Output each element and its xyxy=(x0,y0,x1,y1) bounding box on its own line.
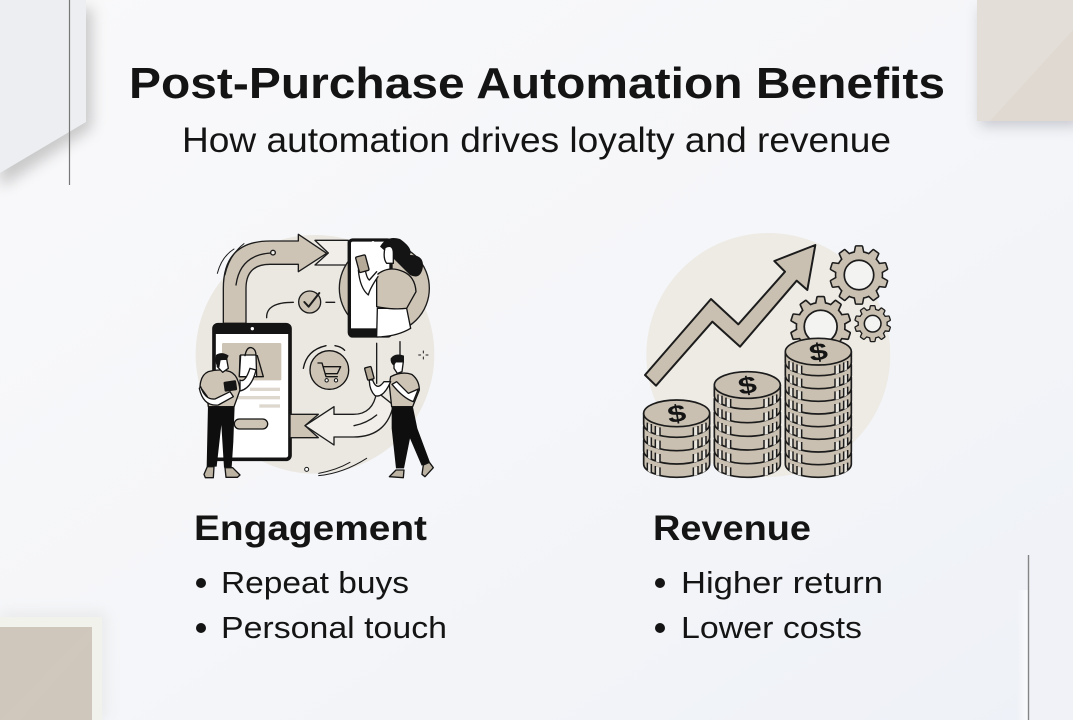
heading: engagement: Engagement xyxy=(194,509,427,548)
icon: small gear xyxy=(855,306,890,341)
panel: revenue text xyxy=(653,509,883,645)
decoration: bottom-left beige panel xyxy=(0,612,106,720)
list item: higher return: Higher return xyxy=(681,565,883,600)
icon: coin stack small xyxy=(644,400,710,477)
list item: lower costs: Lower costs xyxy=(681,610,862,645)
icon: coin stack medium: $ xyxy=(736,371,759,401)
icon: rising arrow xyxy=(645,245,815,386)
icon: lower curved arrow xyxy=(290,342,428,476)
icon: coin stack large xyxy=(785,338,851,477)
panel: engagement text xyxy=(194,509,447,645)
heading: revenue: Revenue xyxy=(653,509,811,548)
decoration: bottom-right line xyxy=(1017,555,1073,720)
illustration: engagement xyxy=(196,234,434,478)
icon: woman with phone xyxy=(339,238,429,337)
subtitle: How automation drives loyalty and revenue xyxy=(182,121,891,160)
icon: coin stack large: $ xyxy=(807,338,830,367)
icon: upper curved arrow xyxy=(217,234,348,323)
icon: man on right xyxy=(364,354,433,478)
icon: tablet with shopping bag xyxy=(214,325,290,459)
title: Post-Purchase Automation Benefits xyxy=(129,59,945,108)
list item: personal touch: Personal touch xyxy=(221,610,447,645)
icon: middle gear xyxy=(791,297,850,356)
decoration: top-left folded panel xyxy=(0,0,92,186)
icon: coin stack medium xyxy=(714,371,780,477)
list item: repeat buys: Repeat buys xyxy=(221,565,409,600)
illustration: revenue xyxy=(644,233,890,477)
icon: man on left xyxy=(199,353,256,478)
icon: shopping cart badge xyxy=(303,346,349,389)
icon: check mark badge xyxy=(267,291,335,318)
decoration: top-right beige panel xyxy=(977,0,1073,126)
icon: coin stack small: $ xyxy=(666,400,688,429)
icon: top gear xyxy=(831,247,887,303)
